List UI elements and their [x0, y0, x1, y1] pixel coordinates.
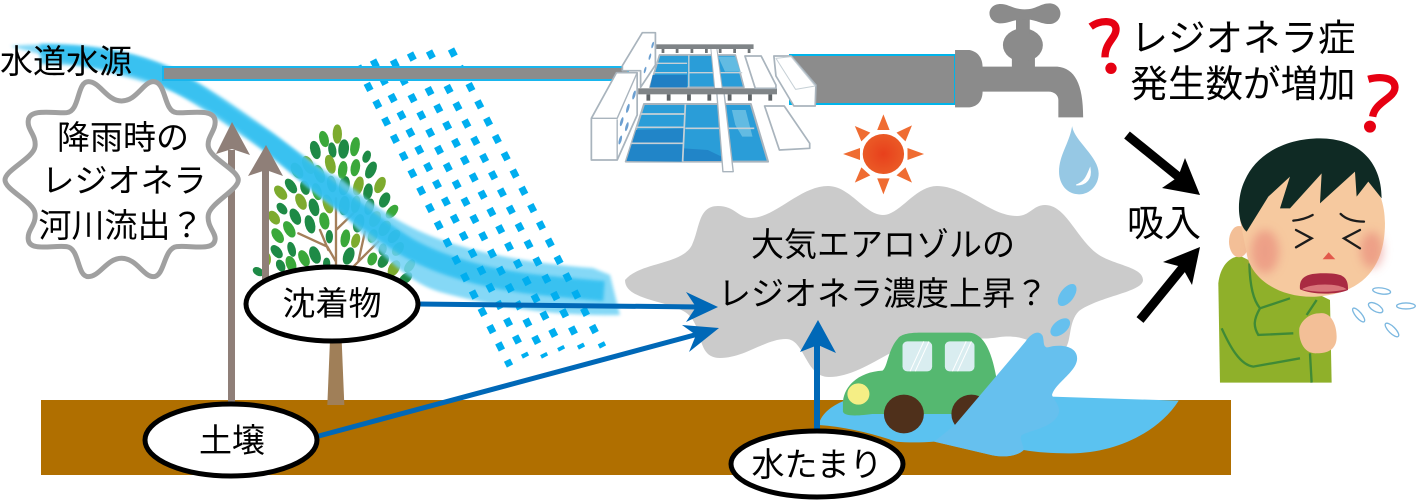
water treatment plant: [591, 33, 816, 172]
label: soil: [145, 404, 317, 476]
splash: [934, 333, 1077, 456]
heading: increase in cases: 発生数が増加: [1130, 63, 1356, 105]
nose: [1323, 252, 1335, 259]
label: puddle: [731, 431, 903, 497]
body: [1218, 256, 1332, 383]
sun: [843, 114, 924, 194]
cheeks: [1251, 230, 1279, 273]
ear: [1229, 226, 1249, 257]
water drop: [1059, 126, 1099, 194]
puddle: [819, 397, 1179, 456]
river stream: [10, 44, 620, 315]
black arrow upper: [1127, 135, 1200, 195]
faucet: [955, 3, 1083, 117]
cloud text: レジオネラ濃度上昇？: [718, 275, 1048, 312]
heading: increase in cases: レジオネラ症: [1130, 17, 1356, 59]
black arrow lower: [1140, 247, 1200, 320]
label: water source: 水道水源: [0, 43, 132, 80]
rain event speech bubble: レジオネラ: [42, 162, 206, 199]
tree: [253, 125, 416, 405]
heading: increase in cases: [1130, 17, 1356, 105]
label: soil: 土壌: [199, 422, 265, 459]
rain event speech bubble: [5, 82, 238, 277]
label: inhalation: 吸入: [1127, 203, 1201, 244]
label: puddle: 水たまり: [751, 446, 883, 483]
cloud text: [718, 226, 1048, 312]
blue arrow: puddle to cloud: [800, 320, 836, 432]
puddle and car: [819, 281, 1179, 456]
label: sediment: [246, 267, 418, 341]
rain dashes: [358, 49, 603, 366]
coughing man: [1218, 138, 1415, 383]
cloud text: 大気エアロゾルの: [751, 226, 1015, 263]
eyes: [1293, 214, 1364, 248]
rain event speech bubble: 河川流出？: [38, 207, 204, 244]
face: [1240, 160, 1385, 297]
red question mark left: [1091, 22, 1117, 74]
car: [843, 333, 997, 433]
sneeze droplets: [1351, 287, 1415, 339]
red question mark right: [1364, 78, 1395, 133]
blue arrow: sediment to cloud: [418, 292, 718, 322]
ground: [41, 400, 1231, 475]
hair: [1239, 138, 1382, 232]
aerosol cloud: [625, 186, 1143, 377]
rain event speech bubble: 降雨時の: [57, 119, 189, 156]
brown arrows from soil: [216, 122, 283, 402]
hand: [1299, 313, 1337, 353]
label: sediment: 沈着物: [282, 285, 382, 322]
left pipe: [163, 67, 628, 80]
blue arrow: soil to cloud: [315, 325, 719, 437]
right pipe: [790, 55, 955, 104]
mouth: [1300, 273, 1348, 294]
